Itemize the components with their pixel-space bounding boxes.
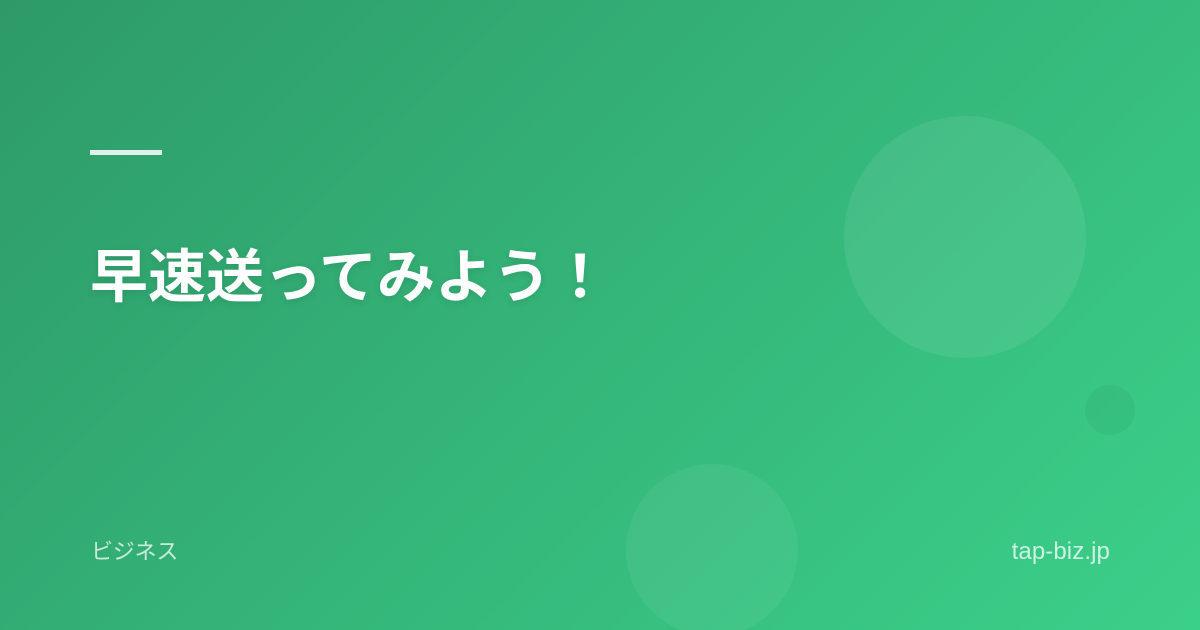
- decorative circle: large upper right: [844, 116, 1086, 358]
- title: 早速送ってみよう！: [90, 245, 609, 310]
- decorative circle: small dark right: [1085, 385, 1135, 435]
- decorative circle: bottom center: [626, 464, 798, 630]
- accent bar: [90, 150, 162, 155]
- category label: ビジネス: [91, 539, 178, 564]
- site domain: tap-biz.jp: [1012, 538, 1110, 565]
